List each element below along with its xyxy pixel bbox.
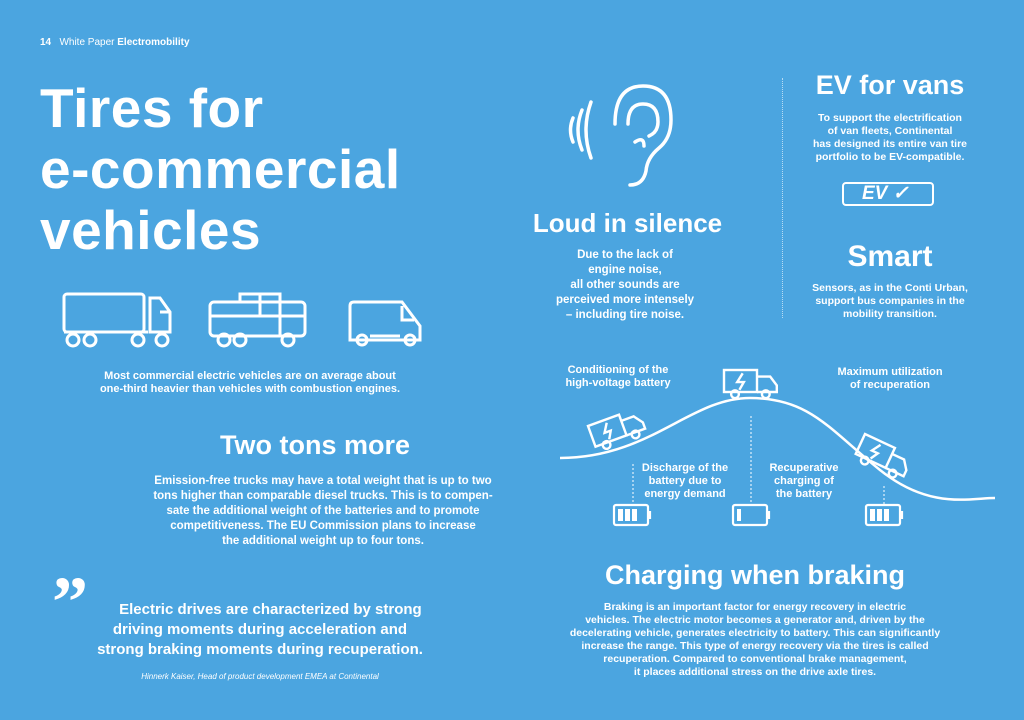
text: loud: Due to the lack of (577, 249, 673, 261)
text: EV: To support the electrification (818, 112, 962, 124)
text: EV: has designed its entire van tire (813, 138, 967, 150)
quote: driving moments during acceleration and (113, 621, 407, 638)
caption vehicles (100, 370, 400, 395)
label: recuperative: the battery (776, 488, 832, 500)
label: max utilization: of recuperation (850, 379, 930, 391)
title: e-commercial (40, 138, 401, 200)
quote: Hinnerk Kaiser, Head of product development EMEA at Continental (141, 672, 379, 681)
icon: bus (210, 294, 305, 346)
quote: strong braking moments during recuperation. (97, 641, 423, 658)
heading: two tons more: Two tons more (220, 430, 410, 460)
text: charging: Braking is an important factor for energy recovery in electric (604, 601, 906, 613)
heading: smart: Smart (847, 240, 933, 273)
diagram: recuperation (560, 368, 995, 526)
text: two tons (153, 475, 493, 547)
caption vehicles: one-third heavier than vehicles with combustion engines. (100, 383, 400, 395)
text: two tons: the additional weight up to four tons. (222, 535, 424, 547)
text: two tons: tons higher than comparable diesel trucks. This is to compen- (153, 490, 493, 502)
text: EV: portfolio to be EV-compatible. (816, 151, 964, 163)
icon: quote mark: ” (52, 562, 88, 642)
label: recuperative: Recuperative (769, 462, 839, 474)
label: conditioning: high-voltage battery (565, 377, 671, 389)
icon: van (350, 302, 420, 345)
batteries (614, 505, 902, 525)
text: loud: all other sounds are (570, 279, 680, 291)
text: charging: vehicles. The electric motor becomes a generator and, driven by the (585, 614, 925, 626)
heading: charging when braking: Charging when braking (605, 560, 905, 590)
text: smart: Sensors, as in the Conti Urban, (812, 282, 968, 294)
label: recuperative: charging of (774, 475, 834, 487)
label: discharge (642, 462, 728, 500)
text: EV (813, 112, 967, 163)
text: loud (556, 249, 694, 321)
text: smart: mobility transition. (843, 308, 937, 320)
text: charging: decelerating vehicle, generates electricity to battery. This can significantly (570, 627, 940, 639)
text: charging: it places additional stress on the drive axle tires. (634, 666, 876, 678)
text: two tons: competitiveness. The EU Commission plans to increase (170, 520, 476, 532)
icon: EV check (842, 182, 934, 206)
heading: EV for vans: EV for vans (816, 70, 964, 100)
label: max utilization (837, 366, 943, 391)
label: conditioning: Conditioning of the (568, 364, 668, 376)
label: max utilization: Maximum utilization (837, 366, 943, 378)
hill curve (560, 398, 995, 500)
text: charging: recuperation. Compared to conventional brake management, (603, 653, 907, 665)
label: discharge: energy demand (644, 488, 726, 500)
label: discharge: battery due to (649, 475, 721, 487)
text: charging (570, 601, 940, 678)
text: smart: support bus companies in the (815, 295, 965, 307)
title: vehicles (40, 199, 261, 261)
text: loud: engine noise, (588, 264, 662, 276)
title: Tires for (40, 77, 264, 139)
label: recuperative (769, 462, 839, 500)
title (40, 77, 401, 261)
trucks (588, 370, 913, 482)
text: EV: of van fleets, Continental (828, 125, 952, 137)
icon: truck (64, 294, 170, 346)
heading: loud in silence: Loud in silence (533, 208, 722, 238)
icon: ear (568, 84, 673, 187)
label: discharge: Discharge of the (642, 462, 728, 474)
caption vehicles: Most commercial electric vehicles are on average about (104, 370, 396, 382)
text: two tons: sate the additional weight of the batteries and to promote (166, 505, 480, 517)
icon: EV check: EV ✓ (862, 183, 909, 204)
text: charging: increase the range. This type of energy recovery via the tires is called (581, 640, 929, 652)
text: two tons: Emission-free trucks may have a total weight that is up to two (154, 475, 492, 487)
quote: Electric drives are characterized by strong (119, 601, 422, 618)
text: smart (812, 282, 968, 320)
text: loud: perceived more intensely (556, 294, 694, 306)
label: conditioning (565, 364, 671, 389)
divider dotted (782, 78, 783, 318)
quote (52, 562, 423, 681)
text: loud: – including tire noise. (566, 309, 684, 321)
icons: vehicles (62, 292, 422, 348)
header: 14 White Paper Electromobility (40, 37, 190, 48)
